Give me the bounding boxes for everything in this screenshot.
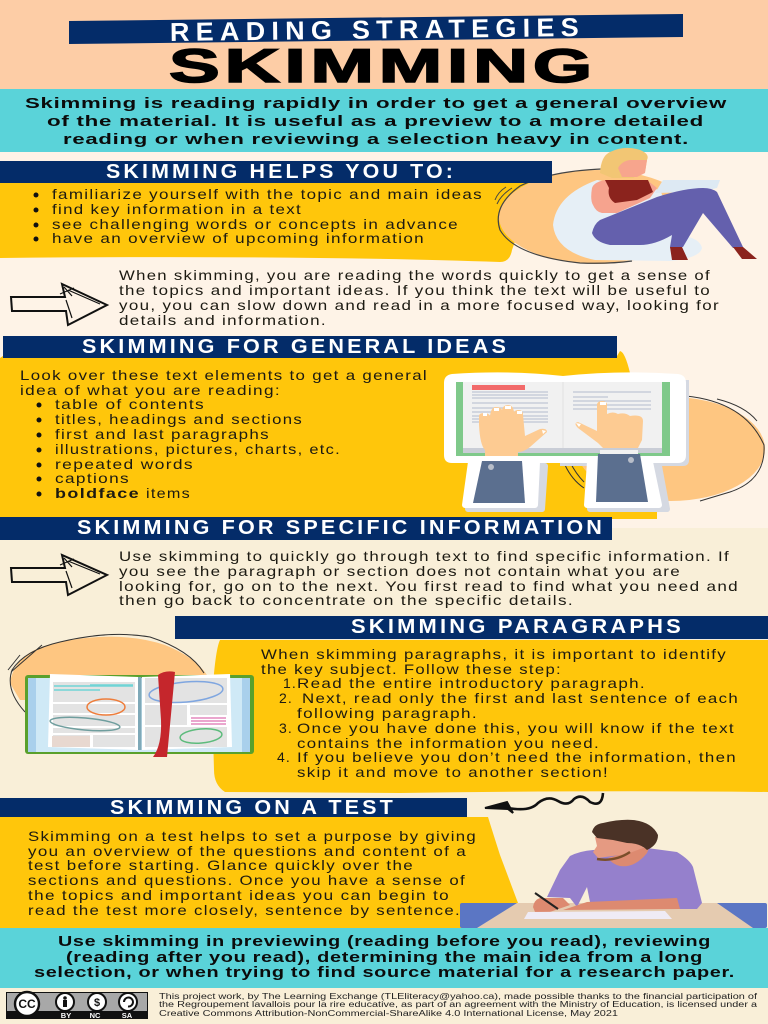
icon: hand-drawn arrow — [11, 284, 107, 325]
list: skimming benefits: find key information in a text — [52, 201, 302, 217]
text block: specific information — [119, 548, 739, 608]
icon: creative commons badge: NC — [90, 1011, 101, 1020]
text block: license credit: the Regroupement lavallois pour la rire educative, as part of an agreement with the Ministry of Education, is licensed under a — [159, 1000, 758, 1009]
title header — [0, 0, 768, 92]
definition banner: reading or when reviewing a selection heavy in content. — [63, 131, 689, 148]
text block: test: read the test more closely, sentence by sentence. — [28, 902, 461, 918]
list: text elements: titles, headings and sections — [55, 411, 303, 427]
panel: skimming paragraphs — [212, 640, 768, 793]
text block: when skimming: details and information. — [119, 312, 327, 328]
text block: general ideas intro: Look over these text elements to get a general — [20, 367, 428, 383]
definition banner: Skimming is reading rapidly in order to get a general overview — [25, 95, 727, 112]
text block: paragraph steps: 3. — [279, 720, 293, 736]
icon: creative commons badge: BY — [61, 1011, 71, 1020]
text block: license credit: Creative Commons Attribution-NonCommercial-ShareAlike 4.0 International License, May 2021 — [159, 1009, 618, 1018]
text block: test: Skimming on a test helps to set a purpose by giving — [28, 828, 477, 844]
title header: READING STRATEGIES — [170, 12, 585, 47]
illustration: hands on open book — [444, 372, 765, 509]
text block: test — [28, 828, 477, 918]
icon: creative commons badge: $ — [94, 997, 100, 1009]
text block: paragraph steps: skip it and move to another section! — [297, 764, 609, 780]
heading: skimming on a test — [0, 796, 467, 819]
text block: paragraph steps: the key subject. Follow these step: — [261, 661, 562, 677]
text block: test: the topics and important ideas you can begin to — [28, 887, 450, 903]
closing banner: Use skimming in previewing (reading before you read), reviewing — [58, 933, 711, 950]
icon: hand-drawn arrow — [11, 555, 107, 595]
text block: when skimming: the topics and important ideas. If you think the text will be useful to — [119, 282, 711, 298]
list: text elements — [36, 396, 341, 501]
closing banner: (reading after you read), determining the main idea from a long — [66, 949, 703, 966]
book and hands cutout — [444, 372, 689, 509]
text block: paragraph steps: Next, read only the first and last sentence of each — [302, 690, 739, 706]
panel: skimming helps you to — [0, 183, 535, 262]
heading: skimming for general ideas: SKIMMING FOR GENERAL IDEAS — [82, 335, 509, 358]
list: text elements: items — [146, 485, 191, 501]
list: skimming benefits: see challenging words or concepts in advance — [52, 216, 459, 232]
list: text elements: illustrations, pictures, charts, etc. — [55, 441, 341, 457]
text block: paragraph steps: If you believe you don’t need the information, then — [297, 749, 737, 765]
heading: skimming for specific information: SKIMMING FOR SPECIFIC INFORMATION — [77, 516, 605, 539]
panel: skimming for general ideas — [0, 351, 657, 519]
list: skimming benefits: have an overview of upcoming information — [52, 230, 425, 246]
panel: skimming on a test — [0, 817, 518, 928]
text block: when skimming: When skimming, you are reading the words quickly to get a sense of — [119, 267, 711, 283]
list: skimming benefits — [34, 186, 483, 246]
heading: skimming on a test: SKIMMING ON A TEST — [110, 796, 396, 819]
list: text elements: table of contents — [55, 396, 205, 412]
icon: squiggly arrow — [485, 793, 603, 813]
text block: paragraph steps: 4. — [277, 749, 291, 765]
text block: test: you an overview of the questions and content of a — [28, 843, 467, 859]
text block: paragraph steps: 2. — [279, 690, 293, 706]
heading: skimming paragraphs: SKIMMING PARAGRAPHS — [351, 615, 684, 638]
list: text elements: repeated words — [55, 456, 194, 472]
heading: skimming paragraphs — [175, 615, 768, 639]
illustration: annotated book — [8, 634, 254, 757]
icon: creative commons badge: CC — [18, 997, 36, 1011]
list: text elements: first and last paragraphs — [55, 426, 270, 442]
heading: skimming helps you to: SKIMMING HELPS YOU TO: — [106, 160, 456, 183]
text block: paragraph steps: following paragraph. — [297, 705, 478, 721]
definition banner — [0, 89, 768, 152]
text block: when skimming: you, you can slow down and read in a more focused way, looking for — [119, 297, 720, 313]
text block: paragraph steps: When skimming paragraphs, it is important to identify — [261, 646, 727, 662]
text block: test: sections and questions. Once you have a sense of — [28, 872, 466, 888]
illustration: student taking a test — [460, 820, 767, 928]
heading: skimming for general ideas — [3, 335, 617, 358]
illustration: woman reading on beanbag — [495, 148, 757, 264]
text block: paragraph steps: 1. — [283, 675, 297, 691]
text block: general ideas intro — [20, 367, 428, 398]
text block: specific information: Use skimming to quickly go through text to find specific information. If — [119, 548, 730, 564]
icon: creative commons badge: SA — [122, 1011, 133, 1020]
text block: license credit: This project work, by The Learning Exchange (TLEliteracy@yahoo.ca), made possible thanks to the financial participation of — [159, 992, 758, 1001]
text block: general ideas intro: idea of what you are reading: — [20, 382, 281, 398]
text block: paragraph steps: contains the information you need. — [297, 735, 600, 751]
text block: paragraph steps: Once you have done this, you will know if the text — [297, 720, 735, 736]
text block: license credit — [159, 992, 758, 1018]
text block: specific information: looking for, go on to the next. You first read to find what you need and — [119, 578, 739, 594]
list: skimming benefits: familiarize yourself with the topic and main ideas — [52, 186, 483, 202]
definition banner: of the material. It is useful as a preview to a more detailed — [47, 113, 704, 130]
text block: when skimming — [119, 267, 720, 328]
text block: specific information: you see the paragraph or section does not contain what you are — [119, 563, 681, 579]
closing banner — [0, 928, 768, 988]
list: text elements: captions — [55, 470, 130, 486]
text block: paragraph steps: Read the entire introductory paragraph. — [297, 675, 646, 691]
icon: creative commons badge — [6, 992, 148, 1020]
title header: SKIMMING — [169, 39, 597, 92]
closing banner: selection, or when trying to find source material for a research paper. — [34, 964, 735, 981]
heading: skimming helps you to — [0, 160, 552, 183]
text block: paragraph steps — [261, 646, 739, 780]
text block: specific information: then go back to concentrate on the specific details. — [119, 592, 574, 608]
text block: test: test before starting. Glance quickly over the — [28, 857, 414, 873]
list: text elements: boldface — [55, 485, 140, 501]
